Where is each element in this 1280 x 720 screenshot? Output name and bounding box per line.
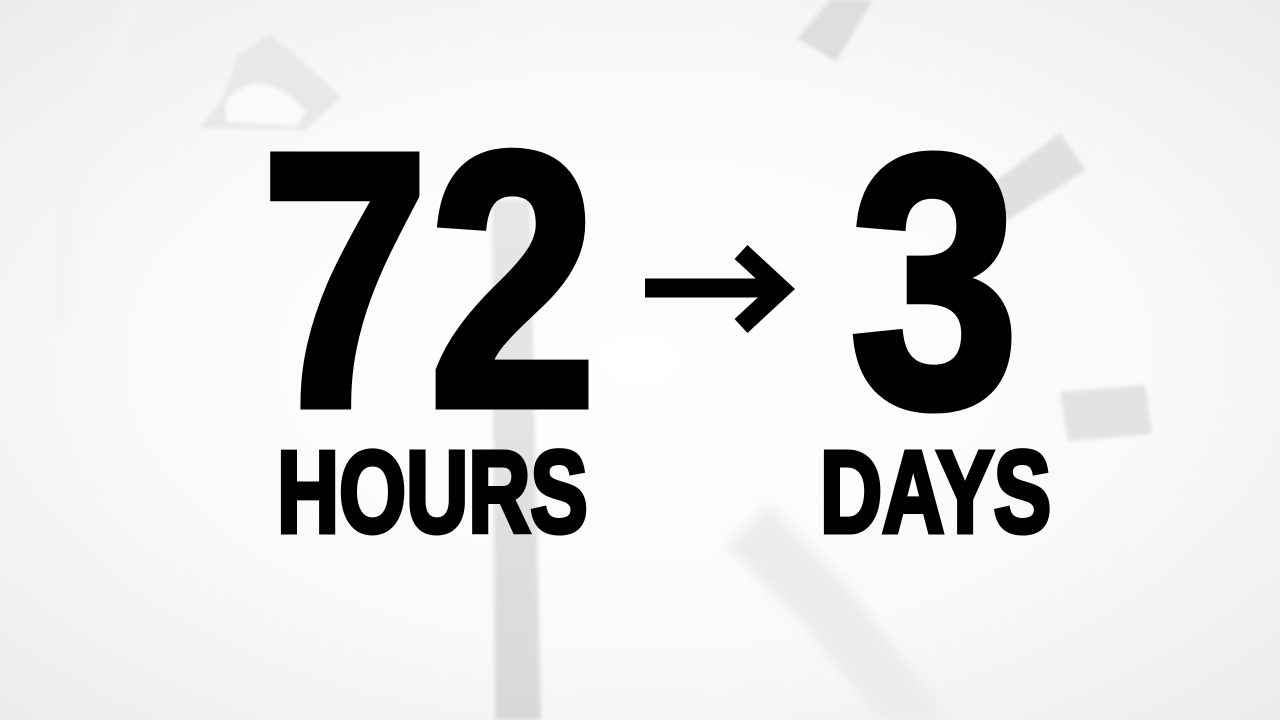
number: 72: 72 [261, 77, 597, 482]
number: 3: 3 [850, 82, 1019, 482]
label: hours: HOURS [277, 428, 588, 557]
label: days: DAYS [820, 428, 1051, 557]
arrow [645, 252, 782, 326]
